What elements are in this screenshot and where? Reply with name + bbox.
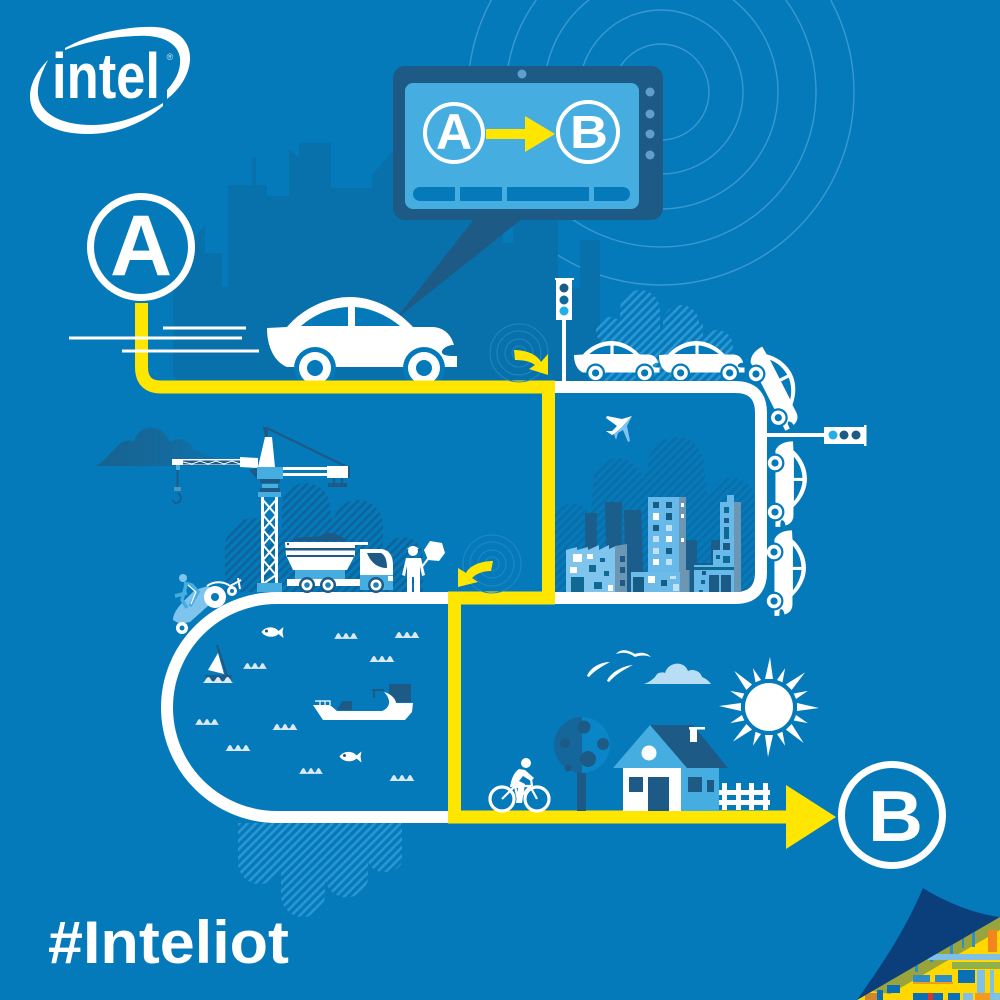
airplane [606,416,632,442]
screen button bar [413,187,630,201]
sailboat [202,645,234,683]
screen arrow [486,116,555,152]
dump truck [285,533,393,593]
city [566,495,741,592]
tree [554,717,610,811]
fence [719,783,770,810]
truck cab [360,549,393,577]
crane cable [267,428,345,466]
screen marker B [558,102,618,162]
truck wheels [299,577,384,593]
gable [613,725,687,768]
solid dark cloud [96,428,240,466]
registered mark: ® [167,52,174,62]
walls [681,768,719,811]
hatched cloud below water loop [238,823,402,917]
logo swoosh [30,27,190,134]
right building windows [699,507,730,592]
truck chassis [295,570,345,579]
house [613,725,728,811]
navigation tablet [393,66,663,220]
marker A [90,196,192,298]
crane counter jib [283,466,350,487]
tablet camera and buttons [518,70,654,160]
tower windows [633,502,672,592]
chimneys [585,502,722,592]
crane apex [258,437,275,467]
traffic light right [765,425,866,446]
birds [587,650,651,682]
crane hook [173,465,181,503]
yellow route from A to B [142,303,790,817]
mosaic corner [857,917,1000,1000]
screen marker A: A [436,104,472,160]
tablet screen [405,83,639,209]
white road loops [167,387,761,817]
speech bubble pointer [395,218,523,320]
speed lines [69,326,259,352]
hatched cloud behind traffic cars [596,290,733,381]
truck load [290,533,348,541]
chimney [690,729,697,742]
roof [650,725,728,768]
small cloud [644,664,711,684]
factory [566,545,616,592]
truck bed [285,542,368,570]
marker A: A [110,198,172,294]
door and windows [629,777,714,811]
intel logo [30,27,190,134]
cyclist [490,758,549,811]
hashtag: #Inteliot [48,909,289,976]
signal rings and turn arrow bottom [458,535,521,593]
destination arrowhead [786,785,836,849]
corner page fold [857,888,1000,1000]
logo wordmark: intel [52,40,160,112]
marker B: B [868,777,923,857]
fish [262,627,362,762]
tower crane [172,427,350,592]
traffic cars [574,340,813,616]
waves [195,632,420,781]
marker B [842,764,942,866]
concentric signal rings [468,0,854,285]
signal rings and turn arrow top [490,324,548,382]
factory windows [570,554,613,591]
crane jib [172,457,258,468]
sun [719,657,819,757]
central tower [679,497,686,592]
cargo ship [313,684,413,720]
screen marker B: B [570,106,608,158]
main car [267,297,457,389]
road worker with sign [402,541,445,592]
crane cab [257,467,283,497]
city skyline silhouette [173,143,600,381]
off-road rider [173,574,241,634]
traffic light top [555,278,574,383]
screen marker A [425,104,483,162]
hatched cloud behind city [553,437,755,592]
crane mast [261,497,278,584]
right building [694,495,734,592]
hatched cloud behind construction [225,483,423,592]
